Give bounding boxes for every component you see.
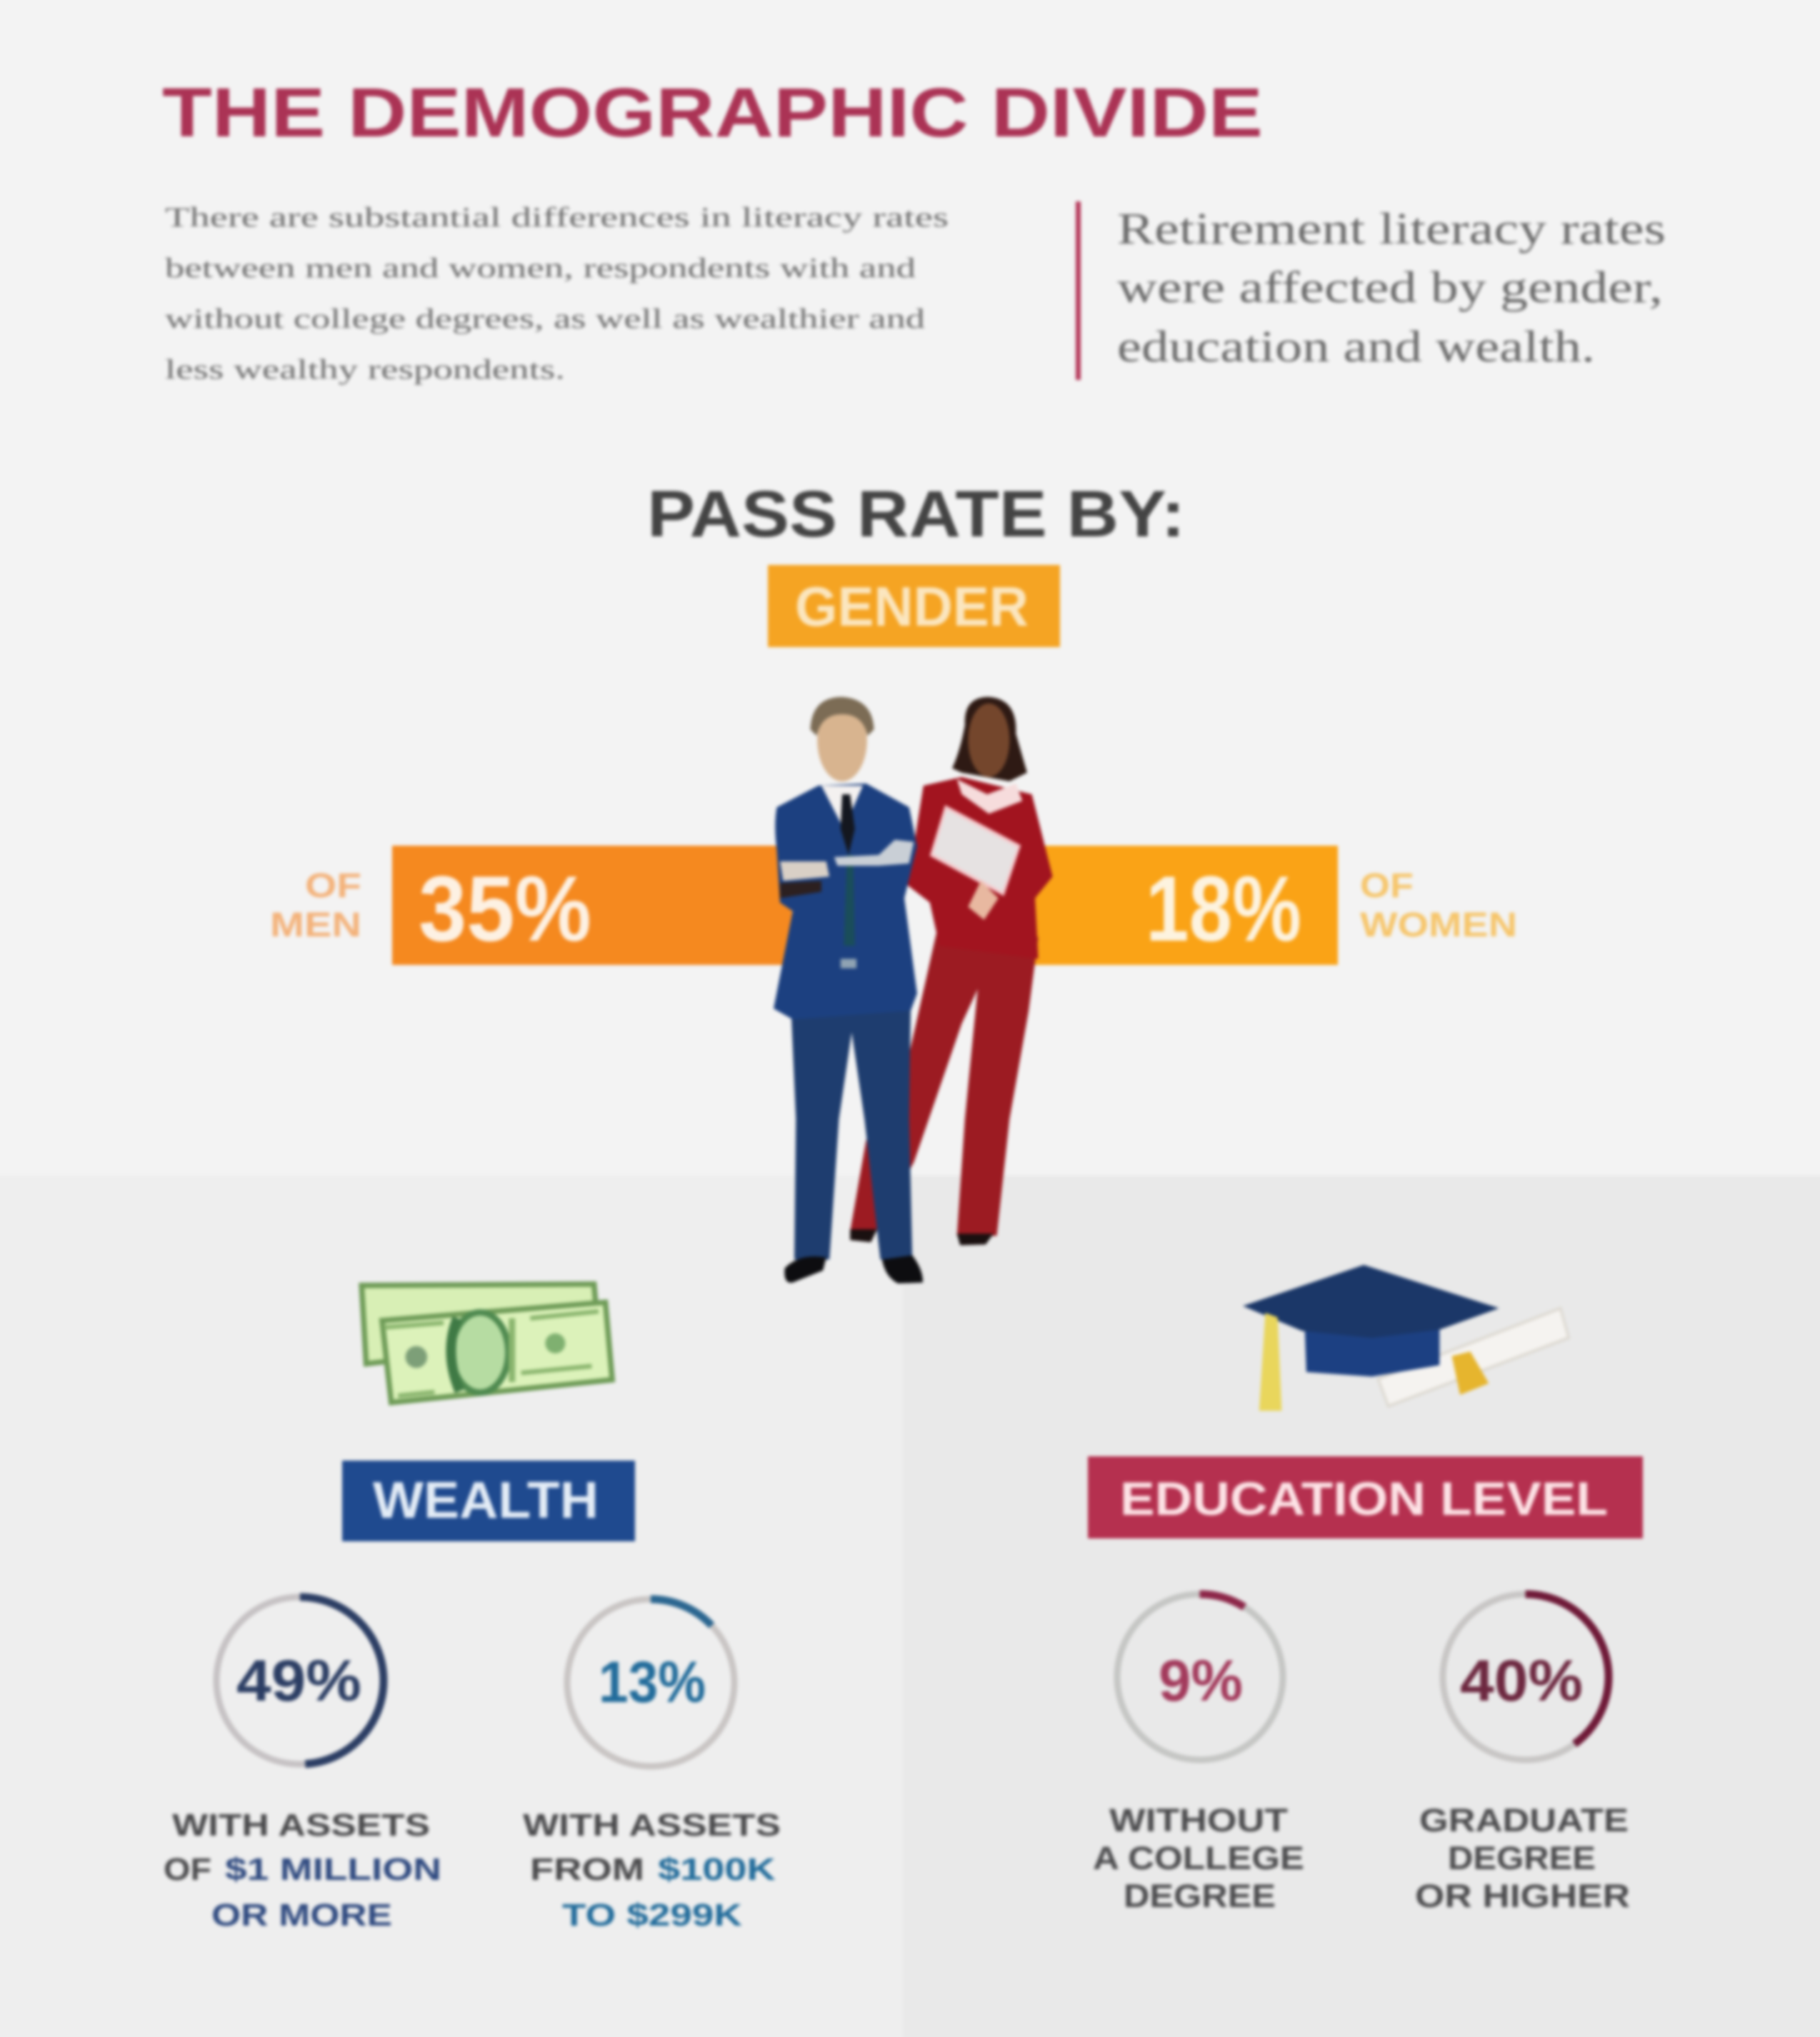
vertical divider [1076,201,1081,380]
label: without a college degree [1093,1802,1304,1914]
icon: dollar bills [361,1284,612,1403]
label: with assets of $1 million or more: OR MORE [211,1898,392,1933]
label: of men: OF [305,867,361,905]
title: THE DEMOGRAPHIC DIVIDE [162,74,1263,151]
donut: 49%: 49% [236,1648,361,1713]
intro paragraph: There are substantial differences in literacy rates [165,202,949,233]
label: with assets from $100k to $299k: WITH ASSETS [523,1808,781,1843]
label: with assets from $100k to $299k [523,1808,781,1933]
label: with assets of $1 million or more: $1 MILLION [225,1852,441,1887]
background: lower right panel [903,1176,1820,2037]
label: of women [1360,867,1517,944]
donut: 40% [1443,1594,1609,1760]
intro paragraph [165,202,949,385]
label: without a college degree: WITHOUT [1109,1802,1288,1838]
label: graduate degree or higher [1415,1802,1630,1914]
intro paragraph: between men and women, respondents with and [165,253,916,284]
donut: 9% [1117,1594,1283,1760]
bar: women 18% [1032,846,1338,965]
illustration: man and woman [774,697,1053,1283]
badge: gender: GENDER [795,575,1029,638]
man [774,697,923,1283]
label: with assets from $100k to $299k: $100K [658,1852,776,1887]
bar: men 35%: 35% [419,856,591,961]
label: graduate degree or higher: DEGREE [1448,1840,1596,1876]
badge: wealth [342,1461,635,1541]
badge: education level: EDUCATION LEVEL [1120,1472,1608,1525]
pull quote: were affected by gender, [1117,264,1663,312]
pull quote: Retirement literacy rates [1117,205,1666,254]
label: of women: OF [1360,867,1414,905]
label: without a college degree: A COLLEGE [1093,1840,1304,1876]
label: of women: WOMEN [1360,906,1517,944]
heading: pass rate by: PASS RATE BY: [647,478,1185,551]
label: of men [270,867,361,944]
donut: 49% [216,1597,384,1764]
badge: gender [768,565,1060,647]
label: of men: MEN [270,906,361,944]
label: with assets of $1 million or more [164,1808,441,1933]
label: with assets of $1 million or more: WITH ASSETS [172,1808,430,1843]
background: upper area [0,0,1820,1178]
badge: education level [1088,1456,1643,1538]
label: with assets from $100k to $299k: TO $299K [562,1898,742,1933]
badge: wealth: WEALTH [373,1472,599,1529]
donut: 13% [567,1599,734,1766]
label: with assets from $100k to $299k: FROM [530,1852,644,1887]
donut: 13%: 13% [599,1650,706,1715]
pull quote [1117,205,1666,371]
intro paragraph: less wealthy respondents. [165,354,565,385]
donut: 9%: 9% [1159,1648,1243,1713]
label: graduate degree or higher: GRADUATE [1419,1802,1629,1838]
bar: men 35% [392,846,792,965]
pull quote: education and wealth. [1117,323,1595,371]
icon: graduation cap and diploma [1243,1265,1569,1411]
donut: 40%: 40% [1460,1648,1583,1713]
label: with assets of $1 million or more: OF [164,1852,211,1887]
intro paragraph: without college degrees, as well as wealthier and [165,304,926,334]
label: graduate degree or higher: OR HIGHER [1415,1878,1630,1914]
woman [850,697,1053,1246]
label: without a college degree: DEGREE [1124,1878,1276,1914]
bar: women 18%: 18% [1146,856,1301,961]
background: lower left panel [0,1176,903,2037]
